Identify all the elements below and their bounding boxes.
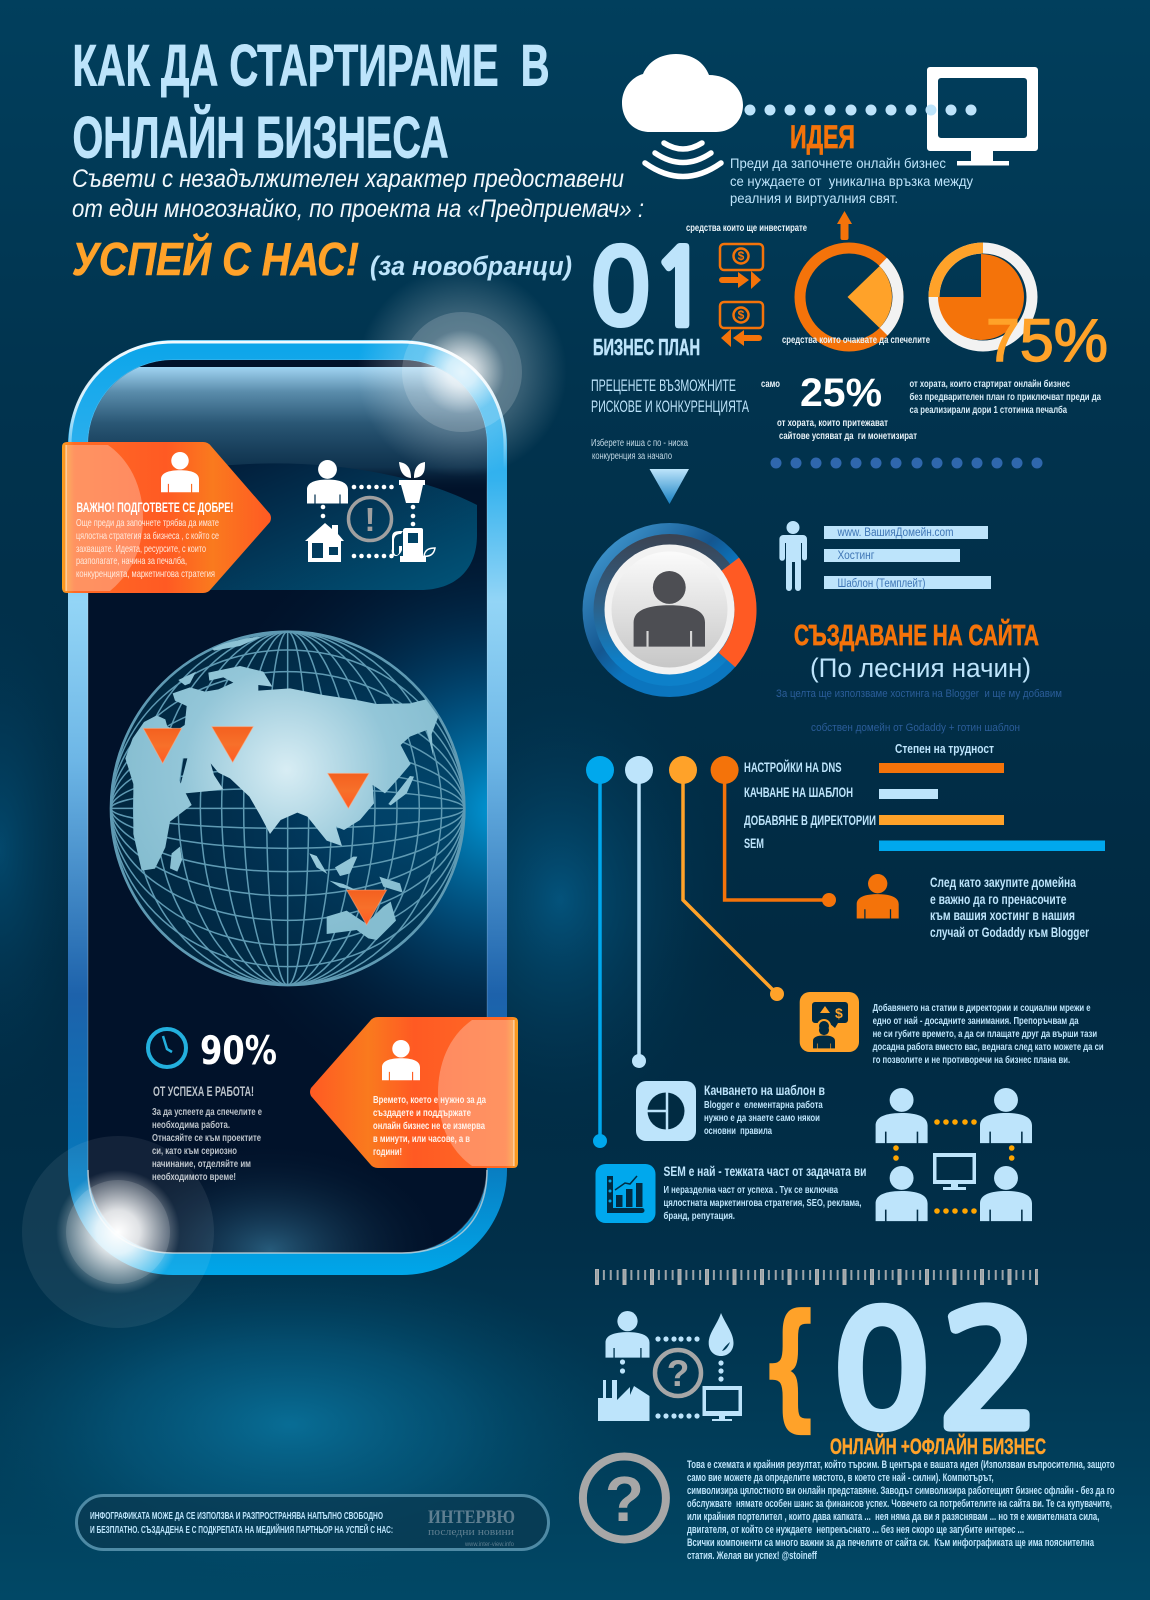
big number 01: 0: [589, 236, 652, 342]
globe grid lines: [111, 632, 464, 985]
heading: online plus offline: ОНЛАЙН +ОФЛАЙН БИЗНЕС: [830, 1434, 1046, 1459]
text: template: нужно е да знаете само някои: [704, 1112, 820, 1124]
stat: 25 percent: [761, 371, 917, 442]
stat: 25 percent: от хората, които притежават: [777, 418, 888, 429]
glass panel with icons: [190, 460, 477, 590]
text: risks and competition: РИСКОВЕ И КОНКУРЕНЦИЯТА: [591, 397, 749, 416]
glass panel with icons: !: [364, 501, 376, 538]
difficulty labels: SEM: [744, 836, 764, 851]
divider ruler: [595, 1275, 1038, 1277]
lens flare: bottom left: [22, 1136, 214, 1328]
stat: clock 90 percent: [148, 1029, 277, 1074]
icon: directories tile: [800, 992, 859, 1052]
text: SEM: цялостната маркетингова стратегия, SEO, реклама,: [664, 1197, 862, 1209]
text: time body: [373, 1094, 486, 1158]
difficulty labels: НАСТРОЙКИ НА DNS: [744, 760, 842, 775]
icon: money flow: $: [738, 308, 745, 322]
text: conclusion: само вие можете да определите мястото, в което сте най - силни). Компютърът,: [687, 1472, 994, 1484]
timeline: four coloured lines: [586, 756, 836, 1148]
text: success is work: си, като към сериозно: [152, 1145, 237, 1157]
connector dots: cloud to monitor: [744, 104, 976, 116]
text: important body: конкуренцията, маркетингова стратегия: [76, 568, 215, 580]
setup bars: Хостинг: [838, 550, 874, 562]
label: funds expected: средства които очаквате да спечелите: [782, 335, 930, 346]
slogan: УСПЕЙ С НАС!: [72, 233, 359, 285]
text: conclusion: [687, 1459, 1115, 1562]
stat: 25 percent: 25%: [800, 371, 882, 415]
icon: person: [382, 1040, 420, 1080]
icon: business scheme: ?: [667, 1353, 689, 1394]
title: КАК ДА СТАРТИРАМЕ В: [72, 34, 550, 98]
icon: money flow: [719, 244, 763, 347]
footer: credits pill: [76, 1496, 548, 1550]
text: template: Blogger е елементарна работа: [704, 1099, 823, 1111]
panel: important card: [62, 442, 271, 593]
subtitle: от един многознайко, по проекта на «Предприемач» :: [72, 195, 644, 223]
text: domain transfer: [930, 875, 1090, 940]
text: important body: разполагате, начина за печалба,: [76, 555, 187, 567]
text: idea description: реалния и виртуалния свят.: [730, 190, 898, 206]
stat: 25 percent: сайтове успяват да ги монетизират: [779, 431, 917, 442]
difficulty labels: [744, 760, 876, 851]
text: time body: Времето, което е нужно за да: [373, 1094, 486, 1106]
icon: user dial: [582, 523, 756, 697]
text: risks and competition: [591, 376, 749, 416]
icon: directories tile: $: [835, 1005, 843, 1021]
arrow: up: [837, 211, 852, 240]
logo: partner: www.inter-view.info: [464, 1542, 515, 1548]
text: success is work: начинание, отделяйте им: [152, 1158, 251, 1170]
text: SEM: бранд, репутация.: [664, 1210, 735, 1222]
difficulty bars: [879, 763, 1105, 851]
stat: 75 percent: 75%: [986, 307, 1108, 374]
slogan: (за новобранци): [370, 251, 572, 281]
slogan: [72, 233, 572, 285]
text: important body: Още преди да започнете трябва да имате: [76, 517, 219, 529]
subtitle: [72, 165, 644, 223]
text: success is work: За да успеете да спечелите е: [152, 1106, 262, 1118]
text: success is work: [152, 1084, 262, 1183]
text: blogger note: За целта ще използваме хостинга на Blogger и ще му добавим: [776, 688, 1062, 700]
text: important body: захващате. Идеята, ресурсите, с които: [76, 543, 206, 555]
continents: [125, 637, 438, 940]
icon: template tile: [636, 1081, 696, 1141]
text: success is work: необходимото време!: [152, 1171, 236, 1183]
label: funds invested: средства които ще инвестирате: [686, 223, 807, 234]
arrow: down triangle: [650, 469, 689, 504]
text: blogger note: собствен домейн от Godaddy + готин шаблон: [811, 722, 1020, 734]
heading: idea: ИДЕЯ: [790, 119, 855, 155]
text: niche tip: [591, 437, 688, 462]
text: template: основни правила: [704, 1125, 772, 1137]
chart: globe with map pins: [111, 632, 464, 985]
subtitle: Съвети с незадължителен характер предоставени: [72, 165, 624, 193]
icon: money flow: $: [738, 249, 745, 263]
icon: person: [161, 452, 199, 492]
text: success is work: необходима работа.: [152, 1119, 230, 1131]
text: template: [704, 1083, 825, 1137]
heading: business plan: БИЗНЕС ПЛАН: [593, 334, 700, 360]
text: template: Качването на шаблон в: [704, 1083, 825, 1098]
text: blogger note: [776, 688, 1062, 734]
stat: 25 percent: само: [761, 379, 780, 390]
text: credits: ИНФОГРАФИКАТА МОЖЕ ДА СЕ ИЗПОЛЗВА И РАЗПРОСТРАНЯВА НАПЪЛНО СВОБОДНО: [90, 1511, 383, 1522]
text: time body: години!: [373, 1146, 402, 1158]
heading: creating the site: СЪЗДАВАНЕ НА САЙТА: [794, 618, 1039, 652]
text: conclusion: статия. Желая ви успех! @stoineff: [687, 1550, 817, 1562]
icon: monitor: [927, 67, 1038, 166]
setup bars: [824, 526, 991, 590]
icon: question mark: [583, 1456, 666, 1540]
text: directories: едно от най - досадните занимания. Препоръчвам да: [873, 1015, 1079, 1027]
icon: cloud with wifi: [622, 54, 743, 176]
text: idea description: Преди да започнете онлайн бизнес: [730, 155, 946, 171]
text: idea description: [730, 155, 973, 206]
panel: time card: [310, 1017, 518, 1168]
icon: orange person: [857, 874, 899, 919]
difficulty labels: КАЧВАНЕ НА ШАБЛОН: [744, 785, 853, 800]
logo: partner: [428, 1507, 515, 1548]
subheading: easiest way: (По лесния начин): [810, 653, 1031, 683]
icon: clock: [148, 1029, 186, 1067]
label: difficulty: Степен на трудност: [895, 741, 994, 756]
chart: investment ring: [800, 248, 898, 346]
text: SEM: SEM е най - тежката част от задачата ви: [664, 1164, 866, 1179]
text: no-plan statistic: без предварителен план го приключват преди да: [910, 391, 1101, 403]
map pins: [143, 727, 387, 925]
icon: business scheme: [598, 1311, 742, 1421]
text: domain transfer: случай от Godaddy към Blogger: [930, 925, 1090, 940]
text: important body: цялостна стратегия за бизнеса , с който се: [76, 530, 219, 542]
text: credits: И БЕЗПЛАТНО. СЪЗДАДЕНА Е С ПОДКРЕПАТА НА МЕДИЙНИЯ ПАРТНЬОР НА УСПЕЙ С НАС:: [90, 1523, 393, 1536]
setup bars: www. ВашияДомейн.com: [837, 527, 954, 539]
title: [72, 34, 550, 170]
text: no-plan statistic: [910, 378, 1101, 416]
icon: question mark: ?: [605, 1463, 644, 1535]
lens flare: top right: [357, 267, 567, 477]
text: credits: [90, 1511, 393, 1536]
text: idea description: се нуждаете от уникална връзка между: [730, 173, 973, 189]
logo: partner: последни новини: [428, 1526, 514, 1538]
text: success is work: ОТ УСПЕХА Е РАБОТА!: [153, 1084, 254, 1099]
icon: strategy scheme: [305, 460, 435, 562]
number 90 percent: 90%: [200, 1029, 277, 1074]
big number 02: 0: [832, 1293, 931, 1452]
panel: phone frame: [68, 340, 507, 1275]
chart: 75 percent ring: [934, 248, 1032, 346]
text: domain transfer: е важно да го пренасочите: [930, 892, 1067, 907]
text: no-plan statistic: от хората, които стартират онлайн бизнес: [910, 378, 1070, 390]
text: directories: [873, 1002, 1104, 1066]
icon: SEM tile: [596, 1164, 656, 1223]
difficulty labels: ДОБАВЯНЕ В ДИРЕКТОРИИ: [744, 813, 876, 828]
divider dots: [770, 458, 1042, 468]
text: success is work: Отнасяйте се към проектите: [152, 1132, 261, 1144]
logo: partner: ИНТЕРВЮ: [428, 1507, 515, 1528]
text: important heading: ВАЖНО! ПОДГОТВЕТЕ СЕ ДОБРЕ!: [76, 499, 234, 515]
text: important body: [76, 517, 219, 580]
big number 01: 1: [651, 236, 709, 342]
text: time body: в минути, или часове, а в: [373, 1133, 470, 1145]
text: niche tip: конкуренция за начало: [592, 451, 672, 462]
text: domain transfer: към вашия хостинг в нашия: [930, 908, 1075, 923]
text: domain transfer: След като закупите домейна: [930, 875, 1076, 890]
text: no-plan statistic: са реализирали дори 1 стотинка печалба: [910, 404, 1067, 416]
brace: {: [759, 1286, 821, 1445]
title: ОНЛАЙН БИЗНЕСА: [72, 106, 448, 170]
text: time body: създадете и поддържате: [373, 1107, 471, 1119]
icon: people network: [876, 1088, 1032, 1221]
text: risks and competition: ПРЕЦЕНЕТЕ ВЪЗМОЖНИТЕ: [591, 376, 736, 395]
big number 01: [589, 236, 709, 342]
big number 02: [832, 1293, 1042, 1452]
big number 02: 2: [937, 1293, 1042, 1452]
setup bars: Шаблон (Темплейт): [838, 578, 926, 590]
text: niche tip: Изберете ниша с по - ниска: [591, 437, 688, 449]
text: time body: онлайн бизнес не се измерва: [373, 1120, 485, 1132]
text: directories: го позволите и не противоречи на бизнес плана ви.: [873, 1054, 1070, 1066]
text: SEM: [664, 1164, 866, 1222]
icon: standing person: [779, 521, 807, 591]
text: SEM: И неразделна част от успеха . Тук се включва: [664, 1184, 838, 1196]
text: conclusion: двигателя, от който се нуждаете непрекъснато ... без нея скоро ще загубите интерес ...: [687, 1524, 1024, 1536]
